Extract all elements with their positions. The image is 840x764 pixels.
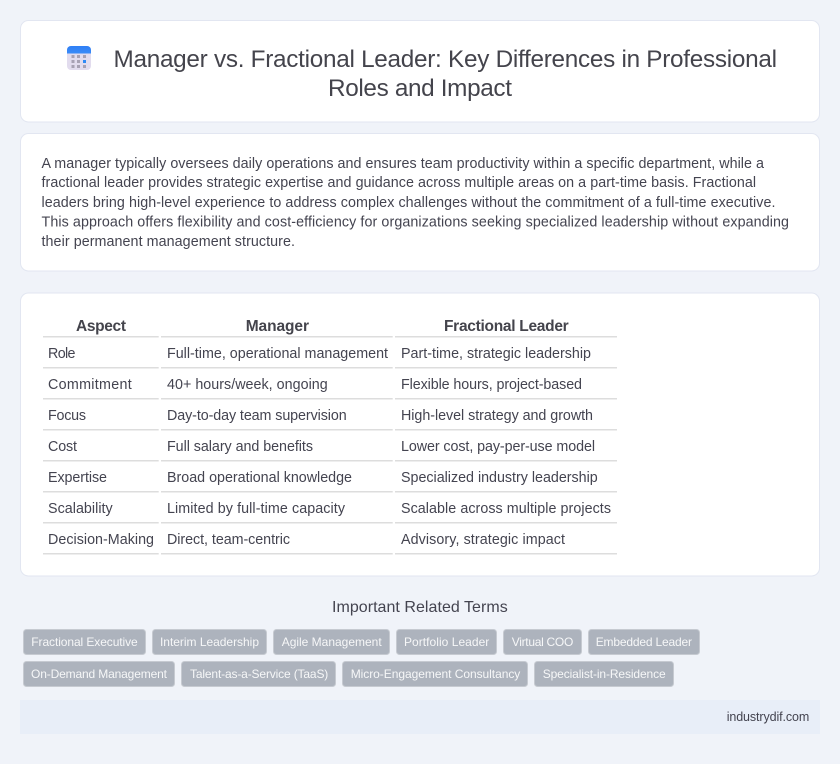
row: expertise: Broad operational knowledge <box>167 470 352 486</box>
tag: Specialist-in-Residence: Specialist-in-Residence <box>543 667 666 681</box>
row: cost: Full salary and benefits <box>167 439 313 455</box>
panel: summary paragraph <box>20 134 820 271</box>
text block: summary: their permanent management structure. <box>42 234 295 250</box>
tag: On-Demand Management: On-Demand Management <box>31 667 168 681</box>
tag: Fractional Executive <box>24 630 146 654</box>
row: expertise <box>48 470 598 486</box>
row: focus <box>48 408 593 424</box>
tag: Embedded Leader <box>588 630 700 654</box>
row: scalability <box>48 501 611 517</box>
tag: On-Demand Management <box>24 662 174 686</box>
row: cost <box>48 439 595 455</box>
row: scalability: Scalable across multiple projects <box>401 501 611 517</box>
tag list: related terms <box>24 630 700 686</box>
row: decision-making: Direct, team-centric <box>167 532 290 548</box>
row: commitment: 40+ hours/week, ongoing <box>167 377 328 393</box>
tag: Portfolio Leader <box>396 630 496 654</box>
row: expertise: Specialized industry leadership <box>401 470 598 486</box>
row: role: Part-time, strategic leadership <box>401 346 591 362</box>
tag: Interim Leadership: Interim Leadership <box>160 635 259 649</box>
tag: Portfolio Leader: Portfolio Leader <box>404 635 489 649</box>
tag: Virtual COO <box>504 630 582 654</box>
text block: summary: This approach offers flexibility and cost-efficiency for organizations seeking specialized leadership without expanding <box>42 214 789 230</box>
row: role: Role <box>48 346 76 362</box>
tag: Micro-Engagement Consultancy <box>342 662 528 686</box>
table header row: Manager <box>246 318 309 335</box>
tag: Talent-as-a-Service (TaaS) <box>182 662 336 686</box>
tag: Interim Leadership <box>152 630 266 654</box>
row: commitment: Commitment <box>48 377 132 393</box>
row: focus: High-level strategy and growth <box>401 408 593 424</box>
text block: summary: fractional leader provides strategic expertise and guidance across multiple areas on a part-time basis. Fractional <box>42 175 756 191</box>
heading: related terms: Important Related Terms <box>332 599 508 616</box>
footer <box>20 700 820 734</box>
row: commitment: Flexible hours, project-based <box>401 377 582 393</box>
tag: Talent-as-a-Service (TaaS): Talent-as-a-Service (TaaS) <box>190 667 328 681</box>
row: focus: Day-to-day team supervision <box>167 408 347 424</box>
title <box>114 46 777 102</box>
tag: Micro-Engagement Consultancy: Micro-Engagement Consultancy <box>351 667 520 681</box>
row: focus: Focus <box>48 408 86 424</box>
text block: summary <box>42 156 789 250</box>
row: decision-making: Advisory, strategic impact <box>401 532 565 548</box>
tag: Agile Management: Agile Management <box>282 635 382 649</box>
panel: header <box>20 20 820 122</box>
tag: Fractional Executive: Fractional Executive <box>31 635 138 649</box>
title: Roles and Impact <box>328 75 512 102</box>
tag: Agile Management <box>274 630 390 654</box>
title: Manager vs. Fractional Leader: Key Differences in Professional <box>114 46 777 73</box>
tag: Specialist-in-Residence <box>534 662 674 686</box>
table header row <box>76 318 569 335</box>
text block: summary: A manager typically oversees daily operations and ensures team productivity within a specific department, while a <box>42 156 764 172</box>
row: scalability: Limited by full-time capacity <box>167 501 346 517</box>
row: role <box>48 346 591 362</box>
footer: industrydif.com <box>727 710 809 724</box>
table header row: Aspect <box>76 318 126 335</box>
row: scalability: Scalability <box>48 501 114 517</box>
row: expertise: Expertise <box>48 470 107 486</box>
table header row: Fractional Leader <box>444 318 569 335</box>
icon: calendar <box>67 46 91 70</box>
row: cost: Cost <box>48 439 77 455</box>
row: decision-making <box>48 532 565 548</box>
tag: Virtual COO: Virtual COO <box>512 635 573 649</box>
tag: Embedded Leader: Embedded Leader <box>596 635 692 649</box>
row: cost: Lower cost, pay-per-use model <box>401 439 595 455</box>
row: decision-making: Decision-Making <box>48 532 154 548</box>
row: role: Full-time, operational management <box>167 346 388 362</box>
text block: summary: leaders bring high-level experience to address complex challenges without the commitment of a full-time executive. <box>42 195 776 211</box>
row: commitment <box>48 377 582 393</box>
panel: comparison table <box>20 293 820 576</box>
